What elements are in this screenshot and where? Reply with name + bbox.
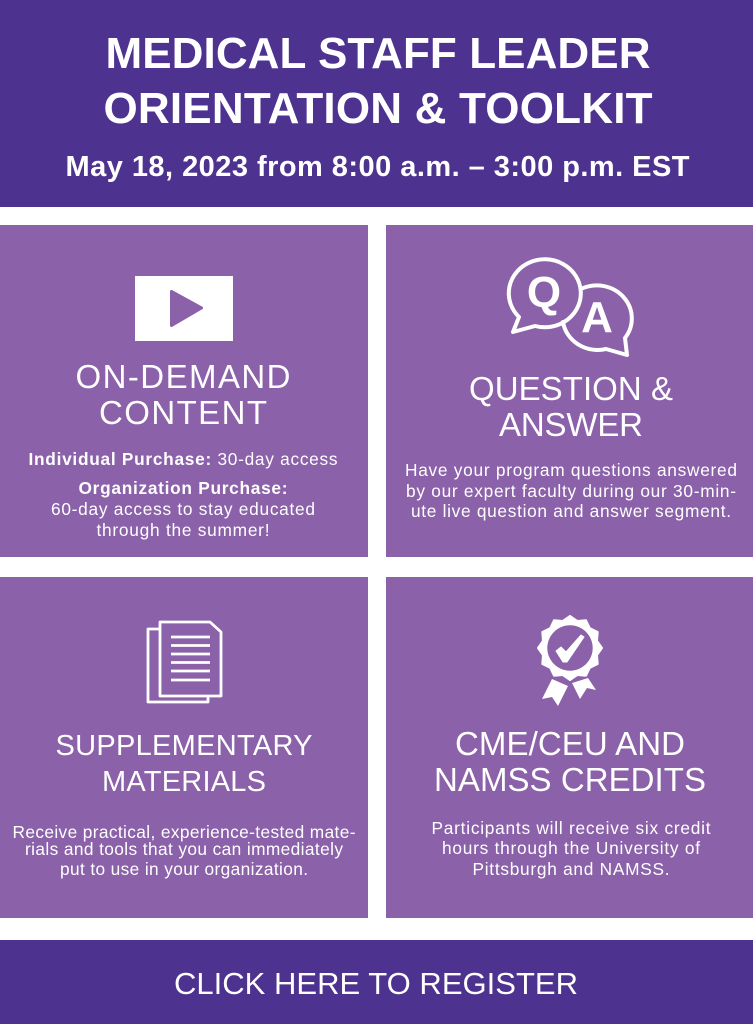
text: supplementary description: Receive practical, experience-tested mate- xyxy=(12,822,356,842)
heading: supplementary materials: MATERIALS xyxy=(102,766,266,798)
heading: question and answer xyxy=(469,370,673,443)
text: purchase options: Individual Purchase: 30-day access xyxy=(28,449,338,469)
text: supplementary description: rials and tools that you can immediately xyxy=(25,839,343,859)
heading: question and answer: QUESTION & xyxy=(469,370,673,407)
text: purchase options: Organization Purchase: xyxy=(78,478,288,498)
header banner xyxy=(0,0,753,207)
text: supplementary description xyxy=(12,822,356,879)
text: purchase options: 60-day access to stay educated xyxy=(51,499,315,519)
title: MEDICAL STAFF LEADER xyxy=(106,29,650,78)
text: question and answer description xyxy=(405,460,737,521)
text: credits description: Participants will receive six credit xyxy=(432,818,711,838)
icon: award ribbon with check xyxy=(538,616,602,706)
heading: question and answer: ANSWER xyxy=(499,406,643,443)
icon: documents xyxy=(148,622,221,702)
text: question and answer description: Have your program questions answered xyxy=(405,460,737,480)
text: purchase options xyxy=(28,449,338,540)
heading: on-demand content: CONTENT xyxy=(99,394,267,431)
text: purchase options: through the summer! xyxy=(96,520,270,540)
heading: CME/CEU and NAMSS credits: CME/CEU AND xyxy=(455,725,685,762)
panel: CME/CEU and NAMSS credits xyxy=(386,577,753,918)
text: supplementary description: put to use in your organization. xyxy=(60,859,308,879)
heading: on-demand content: ON-DEMAND xyxy=(76,358,290,395)
footer banner: register call to action xyxy=(0,940,753,1024)
icon: Q and A speech bubbles: A xyxy=(581,293,613,342)
text: credits description: hours through the University of xyxy=(442,838,700,858)
text: question and answer description: ute live question and answer segment. xyxy=(411,501,731,521)
icon: Q and A speech bubbles: Q xyxy=(527,268,561,317)
text: question and answer description: by our expert faculty during our 30-min- xyxy=(406,481,736,501)
heading: supplementary materials: SUPPLEMENTARY xyxy=(56,730,312,762)
footer banner: register call to action: CLICK HERE TO REGISTER xyxy=(174,966,578,1001)
text: credits description: Pittsburgh and NAMSS. xyxy=(472,859,670,879)
heading: on-demand content xyxy=(76,358,290,431)
panel: question and answer xyxy=(386,225,753,557)
heading: supplementary materials xyxy=(56,730,312,798)
heading: CME/CEU and NAMSS credits xyxy=(434,725,706,798)
date and time: May 18, 2023 from 8:00 a.m. – 3:00 p.m. EST xyxy=(66,151,690,183)
title xyxy=(104,29,653,133)
icon: video play xyxy=(135,276,233,341)
panel: on-demand content xyxy=(0,225,368,557)
icon: Q and A speech bubbles xyxy=(509,259,632,355)
text: credits description xyxy=(432,818,711,879)
title: ORIENTATION & TOOLKIT xyxy=(104,84,653,133)
panel: supplementary materials xyxy=(0,577,368,918)
heading: CME/CEU and NAMSS credits: NAMSS CREDITS xyxy=(434,761,706,798)
